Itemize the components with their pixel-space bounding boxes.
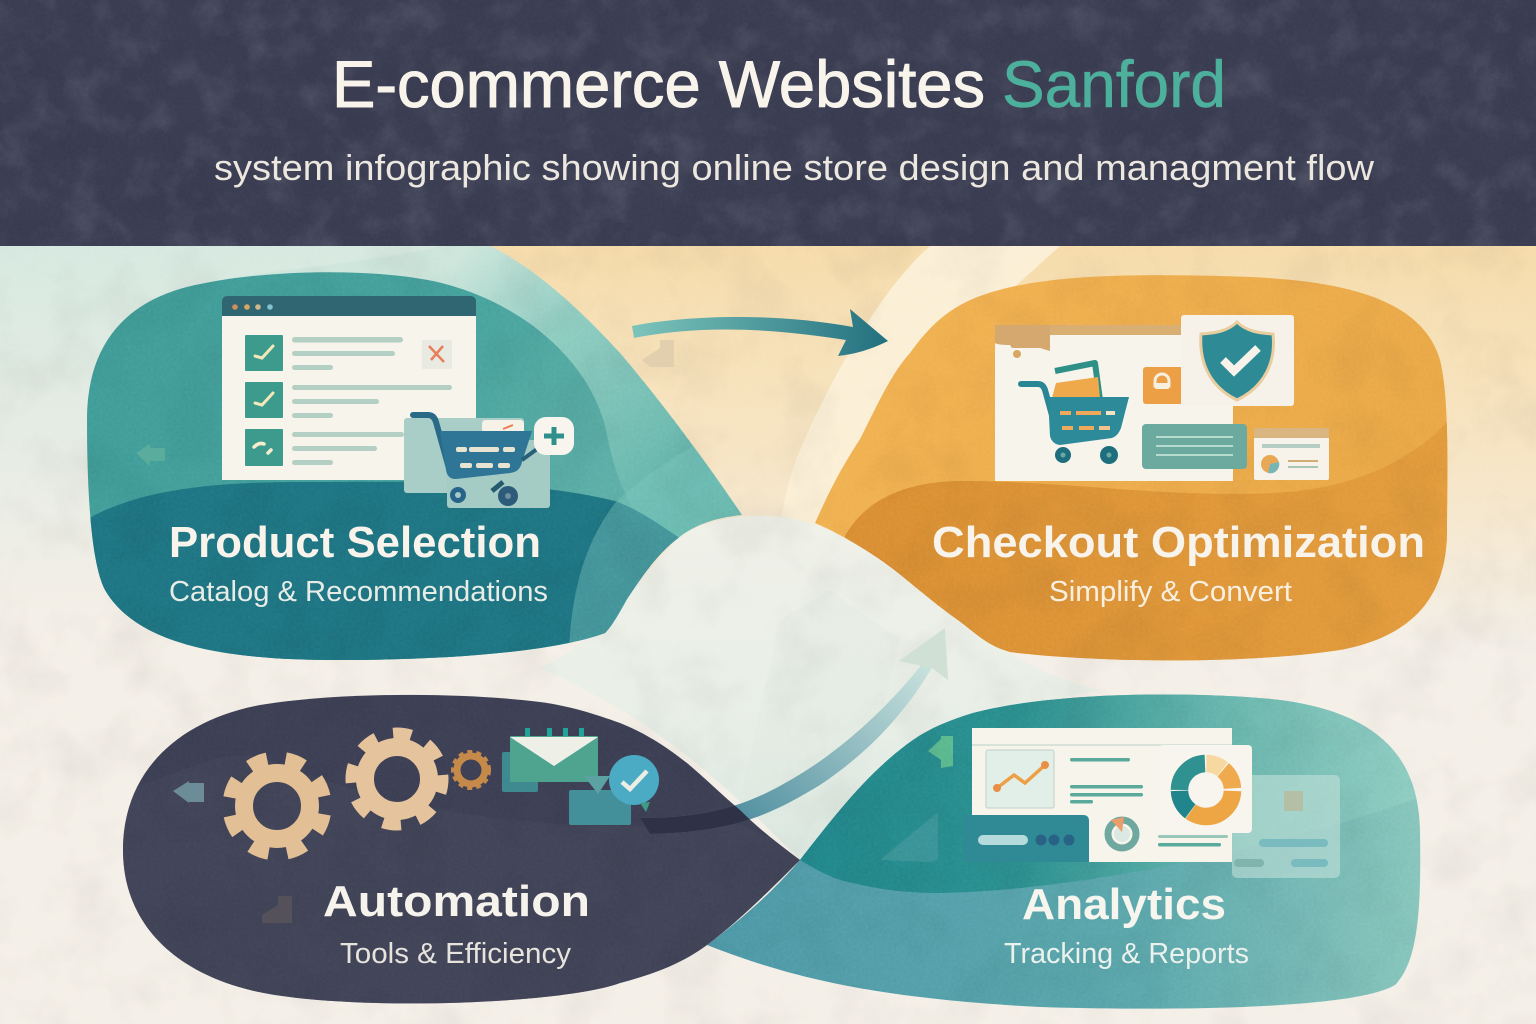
- email: [502, 752, 538, 792]
- window body: [222, 316, 476, 480]
- gear large: [221, 750, 333, 862]
- label: product selection: [169, 518, 548, 608]
- gear small: [453, 752, 489, 788]
- arrow: selection to checkout: [632, 309, 888, 356]
- panel: analytics: [707, 680, 1440, 1009]
- teal box: [1142, 424, 1247, 469]
- title: Sanford: [1002, 47, 1226, 121]
- panel: automation: [123, 694, 800, 1004]
- plus badge: [534, 417, 574, 455]
- title: E-commerce Websites: [332, 47, 985, 121]
- ghost card: [1232, 775, 1340, 878]
- icon: green arrow: [928, 736, 953, 768]
- label: product selection: Catalog & Recommendations: [169, 576, 548, 608]
- icon: gears and email: [221, 728, 659, 862]
- arrow: automation to checkout: [640, 628, 948, 834]
- header band: [0, 0, 1536, 246]
- label: product selection: Product Selection: [169, 518, 541, 567]
- label: checkout optimization: Checkout Optimization: [932, 518, 1425, 567]
- small window: [1254, 428, 1329, 480]
- icon: small faded arrows: [136, 340, 674, 923]
- cart: [1055, 363, 1100, 400]
- gear medium: [348, 730, 446, 828]
- background: [0, 246, 1536, 1024]
- donut card: [1159, 745, 1252, 833]
- window: [972, 728, 1232, 862]
- label: automation: Tools & Efficiency: [340, 938, 572, 970]
- label: checkout optimization: Simplify & Convert: [1049, 576, 1292, 608]
- panel: checkout optimization: [815, 275, 1460, 680]
- text lines: [1070, 758, 1228, 846]
- teal box: [963, 815, 1089, 862]
- subtitle: system infographic showing online store design and managment flow: [214, 147, 1375, 188]
- panel: product selection: [87, 246, 742, 660]
- lock: [1143, 367, 1183, 404]
- label: automation: Automation: [323, 877, 590, 926]
- cart: [413, 415, 450, 472]
- shield card: [1181, 315, 1294, 406]
- icon: product catalog window: [222, 296, 574, 508]
- label: analytics: Tracking & Reports: [1004, 938, 1249, 970]
- label: checkout optimization: [932, 518, 1425, 608]
- icon: analytics dashboard: [963, 728, 1340, 878]
- label: analytics: Analytics: [1022, 880, 1226, 929]
- label: analytics: [1004, 880, 1249, 970]
- check badge: [609, 755, 659, 805]
- cart panel: [404, 418, 524, 493]
- window header: [222, 296, 476, 316]
- small donut: [1108, 820, 1136, 848]
- line chart: [986, 750, 1054, 808]
- label: automation: [323, 877, 590, 970]
- icon: secure checkout window: [995, 315, 1329, 481]
- checklist rows: [245, 335, 452, 466]
